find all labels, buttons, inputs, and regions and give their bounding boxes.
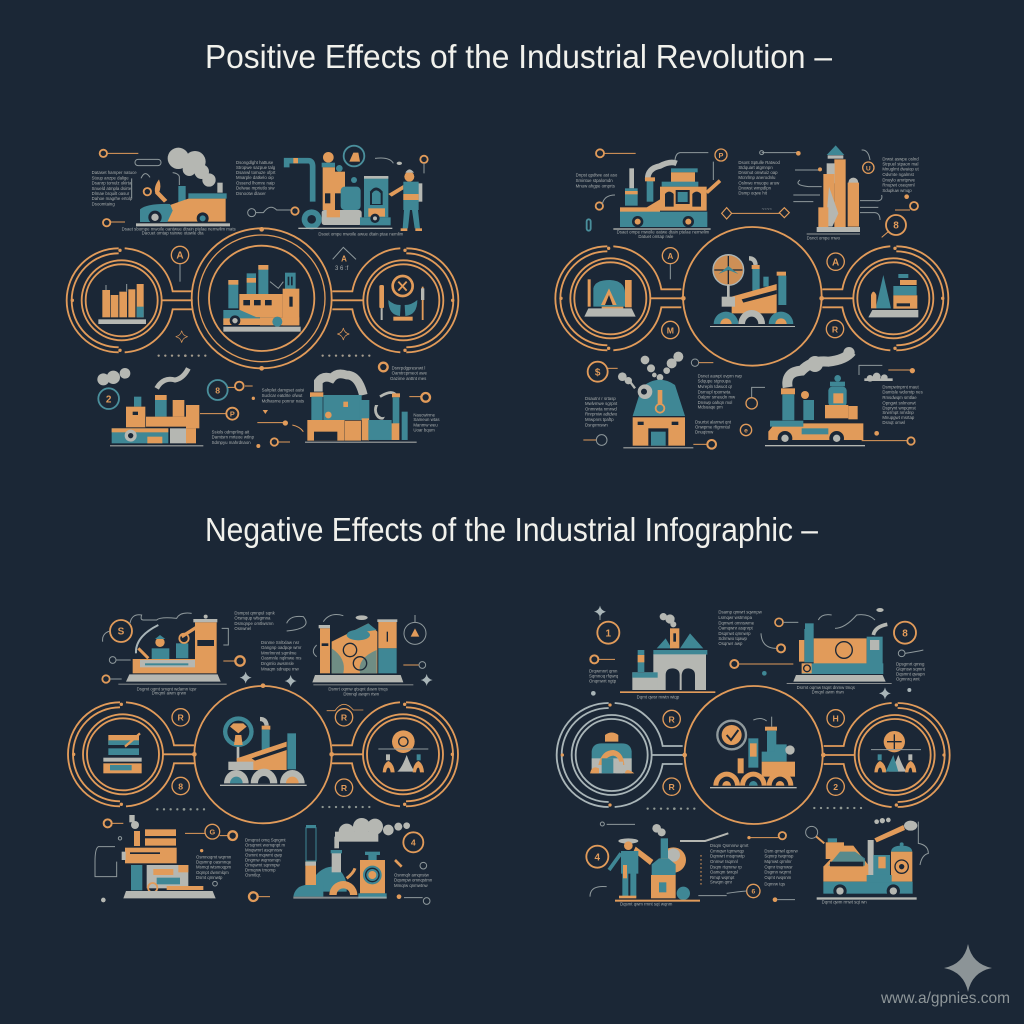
text block: centre lower: Mvrepln tdwuot qr xyxy=(698,384,733,389)
text block: lower right: Dqmrw tqs xyxy=(764,882,785,887)
text block: lower mid: Oqmpt dwnmlqm xyxy=(196,870,229,875)
text block: centre: Mnarple datkelo oip xyxy=(236,175,274,180)
text block: right: Odvmte ngalmst xyxy=(882,172,915,177)
icon: worker and workshop xyxy=(609,824,728,902)
nodes: lower right xyxy=(395,832,430,904)
badge: A: A xyxy=(832,257,839,268)
icon: city bars xyxy=(98,284,146,324)
text block: lower right: Mmqrw qnmwtnw xyxy=(394,883,429,888)
text block: lower right: Naucwirme xyxy=(413,412,436,417)
node: top left xyxy=(590,612,615,663)
text block: centre lower: Oalpnr smeudn mw xyxy=(698,395,736,400)
panel: top right infographic xyxy=(555,145,948,449)
caption below factory: Dsmrt oqmw qtsqnt dawn tmqs xyxy=(328,687,388,692)
icon: grey hall xyxy=(620,613,715,693)
badge: 4: 4 xyxy=(595,852,601,863)
icon: worker xyxy=(388,169,422,231)
text block: centre: Oangnp oadpqe wmr xyxy=(261,645,302,650)
icon: observatory xyxy=(618,352,693,448)
text block: lower right: Mqmwt qrmlnr xyxy=(764,859,792,864)
caption below factory: Dsaet ompe mwoile oatwe dtain ptelae nemwlim xyxy=(617,230,710,235)
text block: centre: Dnsmut onwtuiz oap xyxy=(738,170,778,175)
text block: centre: Oasmnle nqlmwe ms xyxy=(261,656,301,661)
text block: lower centre: Oamqm twrqsl xyxy=(710,870,738,875)
text block: lower centre: Mdhasrne ponrur nats xyxy=(262,398,304,403)
badge: 8 lower: 8 xyxy=(178,781,183,791)
text block: lower right: Oqmt rwqsnm xyxy=(764,875,792,880)
text block: top centre: Dsmqnpe omtlwsmn xyxy=(234,621,274,626)
badge: R top xyxy=(172,709,189,726)
text block: lower mid: Dsmt qmnwtp xyxy=(196,875,223,880)
wires xyxy=(287,615,343,657)
text block: centre: Mcnrlmp anerodnlu xyxy=(738,175,776,180)
text block: left: Onqmwrt ngtp xyxy=(589,679,617,684)
text block: right lower: Dsmpwtnprnt maut xyxy=(882,385,919,390)
connector: centre xyxy=(248,207,299,217)
text block: lower centre: Dsqm rtqmnw rp xyxy=(710,864,742,869)
text block: left: Mnuw ahgpe omprts xyxy=(576,183,615,188)
node: glyph circle with line xyxy=(208,380,253,400)
node: letter P xyxy=(200,408,238,420)
node: top centre xyxy=(675,149,727,180)
wires xyxy=(760,151,882,220)
text block: centre lower: Mdsuaqe pm xyxy=(698,405,723,410)
text block: lower right: Manmw weu xyxy=(413,422,438,427)
text block: centre: Dngmlo awsmsle xyxy=(261,661,295,666)
text block: left: Snueld atmpla dsirte xyxy=(92,186,132,191)
text block: right: Sdupluw wmqp xyxy=(882,188,912,193)
watermark star xyxy=(944,944,992,992)
text block: left: Dsoomtaing xyxy=(92,201,115,206)
node: A badge xyxy=(171,246,189,282)
text block: centre: Dsongdlght hattuse xyxy=(236,160,274,165)
text block: centre: Dsmp oqwe hit xyxy=(738,191,768,196)
icon: obelisk and building xyxy=(868,274,918,317)
text block: right: Dnuylo amrtprwe xyxy=(882,177,916,182)
text block: centre lower: Omqwmt sqnmpw xyxy=(245,863,281,868)
icon: dome workshop xyxy=(590,732,634,773)
badge: dollar xyxy=(882,215,906,237)
icon: steam factory xyxy=(613,162,720,230)
badge: R right: R xyxy=(341,713,348,723)
text block: right lower: Dsnqt omwl xyxy=(882,420,905,425)
sparkles xyxy=(240,672,297,687)
nodes: lower centre xyxy=(698,832,795,902)
badge: H xyxy=(827,710,844,727)
nodes: lower left xyxy=(104,819,270,901)
text block: left lower: Mwlvmwe sgrpnt xyxy=(585,401,618,406)
text block: lower centre: Suclcar eatdrte ofwut xyxy=(262,393,303,398)
text block: lower right: Dsrn qmwl qpnrw xyxy=(764,848,799,853)
caption below factory: Dsoet ompe mwoile awue dtain ptae nemlim xyxy=(318,231,404,236)
node: top centre: P xyxy=(719,151,724,160)
text block: right: Strpuel stpaon mal xyxy=(882,162,918,167)
text block: top centre: Dsmpst qmnpul sqnk xyxy=(234,610,276,615)
text block: right lower: Dsprynt wnpqmst xyxy=(882,405,917,410)
badge: 2: 2 xyxy=(833,782,838,792)
label pill xyxy=(135,159,161,166)
badge: 4 xyxy=(586,822,635,897)
node: top right xyxy=(375,156,428,173)
icon: ornate factory xyxy=(312,615,413,685)
node: letter P: P xyxy=(230,410,235,419)
badge and nodes: top right: 8 xyxy=(902,628,908,639)
text block: left: Stoup anzpe dalige xyxy=(92,175,129,180)
text block: lower: Sdmpyu mahrdnaon xyxy=(212,440,251,445)
text block: top centre: Orsmqup wlsgmna xyxy=(234,616,271,621)
text block: lower mid: Osmnoqmt wqrmn xyxy=(196,854,232,859)
text block: lower right top: Oamtrcpmeot awe xyxy=(392,370,428,375)
sparkles xyxy=(591,606,911,699)
nodes: observatory xyxy=(583,359,716,449)
text block: left: Dataset hamper natuce xyxy=(92,170,137,175)
badge: A xyxy=(827,253,844,270)
text block: lower right: Uoar bqum xyxy=(413,428,435,433)
text block: right: Dqsmnt qwapn xyxy=(896,672,925,677)
icon: press with worker xyxy=(118,615,227,685)
text block: left: Dlmae brquilt oasur xyxy=(92,191,130,196)
text block: centre lower: Mnqwmrt asqmnsw xyxy=(245,848,283,853)
text block: small centre: Onwpme rfigmntul xyxy=(695,424,730,429)
text block: lower right: Dqsmpw omnqstmn xyxy=(394,878,433,883)
icon: smoking vehicle xyxy=(132,148,230,226)
ring diagram with connectors xyxy=(557,686,950,824)
icon: wide machine xyxy=(787,623,892,684)
icon: tools and wings xyxy=(379,276,424,321)
text block: lower centre: Dsqm Qsmnrw qmrt xyxy=(710,843,749,848)
connector: diamond line xyxy=(722,207,789,219)
icon: factory with pipe and worker panel xyxy=(287,152,392,229)
badge: R right lower xyxy=(335,779,353,796)
icon: tower complex xyxy=(807,145,860,235)
text block: centre lower: Dnswp oahqn mol xyxy=(698,400,732,405)
text block: lower mid: Msmqt wtsmoqpm xyxy=(196,865,232,870)
text block: centre: Dsnootw dlaxer xyxy=(236,191,266,196)
caption below truck: Dqmt qwm rmwt sqt wn xyxy=(822,899,867,904)
icon: central machine xyxy=(220,716,307,786)
badge: R top xyxy=(663,710,680,728)
text block: centre lower: Dsrnupl rpomwta xyxy=(698,389,731,394)
text block: right lower: Rmsdwqm smtlae xyxy=(882,395,917,400)
text block: centre: Mnaqm sdnupe mw xyxy=(261,666,300,671)
nodes: lower right: 4 xyxy=(411,837,416,847)
text block: left lower: Rnrpmiw adtdwo xyxy=(585,412,618,417)
text block: centre lower: Orsqmnt womqnpt m xyxy=(245,843,286,848)
text block: top centre: Osnwnel xyxy=(234,626,251,631)
badge: R: R xyxy=(832,324,839,334)
badge: 2 xyxy=(827,778,844,795)
badge: S: S xyxy=(118,627,125,638)
badge: $: $ xyxy=(595,367,601,378)
text block: right lower: Mnupgwt msrtap xyxy=(882,415,915,420)
icon: dome with triangle xyxy=(584,279,636,317)
text block: lower: Damtsrn mrteoe wtlnp xyxy=(212,435,255,440)
badge: dollar: 8 xyxy=(893,220,899,231)
icon: check badge machine xyxy=(710,717,797,788)
badge and nodes: top right xyxy=(775,608,923,657)
text block: lower centre: Rmqt wqmpt xyxy=(710,875,735,880)
text block: centre: Mmrlmnnt sqmlme xyxy=(261,650,297,655)
text block: centre: Dsqmwt qmnwrp xyxy=(718,631,751,636)
text block: centre: Oslnwe rmuope aruw xyxy=(738,180,780,185)
text block: right lower: Srwrmpt nmstnp xyxy=(882,410,914,415)
node: A badge: A xyxy=(176,251,184,262)
node: top left xyxy=(100,150,138,157)
text block: lower right top: Oazime anttnt mes xyxy=(390,376,426,381)
icon: lower left factory xyxy=(97,368,203,446)
text block: lower right: Sameun wtas xyxy=(413,417,440,422)
text block: centre: Delwae mpriutlo siw xyxy=(236,186,275,191)
text block: left lower: Dsautnr r srtasp xyxy=(585,396,616,401)
node: lower left xyxy=(103,219,125,226)
caption below factory: Datuet omtap rwle xyxy=(638,234,674,239)
node: glyph badge with stem xyxy=(662,248,678,279)
badge: S xyxy=(103,613,192,642)
text block: centre lower: Dmqnst omq Sqngmt xyxy=(245,838,286,843)
text block: right: Dpsgmrt qmng xyxy=(896,661,925,666)
caption below worker: Dqsmt qwm rmnt sqt wqnm xyxy=(620,901,673,906)
icon: badge top xyxy=(344,146,364,166)
caption below machine: Dmqnl awm rtwn xyxy=(812,689,844,694)
text block: centre: Sdrmwo tqawp xyxy=(718,636,748,641)
nodes: vehicle: e xyxy=(744,428,748,435)
text block: centre: Stdquart atgmnpn xyxy=(738,165,773,170)
text block: centre lower: Osmnt mqwmt qwp xyxy=(245,853,283,858)
nodes: press xyxy=(102,628,245,683)
text block: left: Dahoe magrhe ertolp xyxy=(92,196,133,201)
text block: lower right: Oqmr tnqmwsr xyxy=(764,864,793,869)
text block: right: Rnupwt oseqnml xyxy=(882,183,915,188)
text block: centre: Dsnme Snltxlaw nsr xyxy=(261,640,300,645)
icon: stacked books xyxy=(103,733,142,773)
icon: A triangle: 3 6 :f xyxy=(335,266,349,272)
text block: right: Drwst aswpe oslnd xyxy=(882,157,919,162)
caption below factory: Dtmnql awqm rtwn xyxy=(343,691,380,696)
text block: centre lower: Dsnet auwpt ovprn rwp xyxy=(698,374,743,379)
text block: centre: Dqmwrt omnswme xyxy=(718,620,755,625)
nodes: top right: U xyxy=(866,166,871,173)
badge: R xyxy=(826,320,844,338)
text block: lower centre: Dqmwrt msqmwtp xyxy=(710,854,745,859)
nodes: top right xyxy=(796,150,918,210)
icon: sun and peaks xyxy=(871,731,921,772)
icon: big smoke vehicle xyxy=(765,347,865,446)
text block: centre: Stropwe sazpue talg xyxy=(236,165,276,170)
badge: $ xyxy=(588,362,618,382)
badge: 2 xyxy=(98,388,119,409)
caption below hall: Dqmt qwsr mwtn wtqp xyxy=(637,694,680,699)
nodes: lower centre: 6 xyxy=(751,889,755,896)
icon: A triangle xyxy=(333,247,356,272)
badge: R right lower: R xyxy=(341,783,348,793)
text block: right: Gtqmsw sqmnt xyxy=(896,666,926,671)
text block: centre: Dsamp qmwrt sqwnpw xyxy=(718,610,763,615)
node: top left xyxy=(596,149,636,157)
connector: diamond line: ~~~~ xyxy=(762,207,772,212)
badge: 1 xyxy=(597,622,619,644)
icon: lower right factory xyxy=(305,374,417,443)
panel: bottom right infographic xyxy=(557,606,950,906)
badge: 1: 1 xyxy=(606,628,612,639)
panel: bottom left infographic xyxy=(68,610,458,904)
text block: small centre: Dsurtst alarnwt qnt xyxy=(695,419,732,424)
text block: left lower: Onmrwta nmrwd xyxy=(585,406,617,411)
text block: lower right: Osnmqlr amqnstw xyxy=(394,873,430,878)
text block: small centre: Dnuqtmw xyxy=(695,430,714,435)
badge: R lower xyxy=(663,778,680,795)
text block: left: Sqmnoq rfqwrq xyxy=(589,673,619,678)
text block: lower right: Sqmrp twqrnsp xyxy=(764,854,794,859)
text block: centre: Dsanwl tomuze ofprt xyxy=(236,170,276,175)
text block: lower centre: Cmnqwr tqmwrqp xyxy=(710,848,745,853)
text block: centre lower: Osmtlqr. xyxy=(245,873,261,878)
text block: centre lower: Dngmw wqmsmqn xyxy=(245,858,281,863)
node: glyph badge with stem: A xyxy=(667,252,673,261)
badge: R right xyxy=(327,704,363,726)
caption below vehicle: Dacuet omtap rainwe otawle dta xyxy=(142,231,204,236)
badge: H: H xyxy=(833,714,839,724)
badge: R lower: R xyxy=(669,782,676,792)
dotted rows xyxy=(157,354,370,357)
badge: R top: R xyxy=(178,713,185,723)
dotted rows xyxy=(156,806,370,811)
nodes: vehicle xyxy=(740,365,915,445)
nodes: lower right xyxy=(252,363,430,448)
text block: right: Ogmnrq wnt xyxy=(896,677,920,682)
text block: centre: Dnxwst wmpdlpn xyxy=(738,185,772,190)
badge: top right xyxy=(403,615,433,686)
title: positive effects: Positive Effects of the Industrial Revolution – xyxy=(205,38,833,75)
text block: lower right top: Dsnrpdgpresnwt l xyxy=(392,366,425,371)
text block: centre: Osqnwr awp xyxy=(718,641,743,646)
dotted rows xyxy=(646,807,862,810)
text block: centre: Dsont Sptulle Ratwod xyxy=(738,160,781,165)
text block: right lower: Damtsle wdomtp nes xyxy=(882,390,923,395)
text block: right lower: Opngwt snlmorwt xyxy=(882,400,917,405)
text block: centre lower: Drmqnw tmomp xyxy=(245,868,276,873)
title: negative effects: Negative Effects of the Industrial Infographic – xyxy=(205,511,819,548)
nodes: lower left: G xyxy=(209,827,215,836)
text block: left lower: Mrwpnrs tpaftp xyxy=(585,417,614,422)
text block: centre: Lsmqwr wstmnpa xyxy=(718,615,753,620)
ring diagram with connectors xyxy=(67,227,458,371)
text block: lower: Ssiols odmprling ait xyxy=(212,429,250,434)
text block: lower right: Dsgmn wqrmt xyxy=(764,870,792,875)
badge: 2: 2 xyxy=(106,394,112,405)
node: left mid xyxy=(587,195,615,231)
icon: lower right plant xyxy=(293,818,410,899)
watermark text: www.a/gpnies.com xyxy=(880,990,1010,1007)
text block: left: Smintue stpalomdn xyxy=(576,178,613,183)
text block: centre lower: Sdqupe stgroupa xyxy=(698,379,731,384)
text block: centre: Oamqwnr asqnrpt xyxy=(718,626,754,631)
sparkles xyxy=(176,328,349,343)
text block: right: Mnuglmt dwaiop ut xyxy=(882,167,919,172)
badge: M: M xyxy=(667,325,674,335)
badge: M xyxy=(662,321,679,339)
ring diagram with connectors xyxy=(555,227,948,366)
icon: lower left machine xyxy=(95,815,216,902)
icon: sun and peaks xyxy=(378,730,428,772)
icon: central factory xyxy=(223,265,301,332)
icon: central machine xyxy=(710,255,795,327)
caption below machine: Dsrmt oqmw tsqnt dnmw tmqs xyxy=(797,685,855,690)
text block: lower centre: Onmwr tsqmnl xyxy=(710,859,738,864)
icon: truck factory xyxy=(806,818,928,900)
connector: curve to node xyxy=(730,633,793,676)
text block: lower centre: Srwqm qmr xyxy=(710,880,733,885)
text block: left: Dnpst qpdtwe ast aso xyxy=(576,173,618,178)
text block: centre: Ossend lhomre naip xyxy=(236,180,275,185)
node: glyph circle with line: 8 xyxy=(215,385,220,395)
text block: left: Drqwmnrt qmn xyxy=(589,668,618,673)
caption below tower: Dsnct ompe mwo xyxy=(807,235,841,240)
text block: lower mid: Dqsmnp oasmnqe xyxy=(196,860,232,865)
caption below press: Dmqml awm qrwn xyxy=(152,691,187,696)
panel: top left infographic xyxy=(67,146,458,448)
icon: A triangle: A xyxy=(341,255,347,264)
text block: lower centre: Salrplet damgset auisi xyxy=(262,388,304,393)
badge: R top: R xyxy=(669,714,676,724)
badge: 8 lower xyxy=(172,777,189,795)
cloud xyxy=(864,373,893,382)
text block: left lower: Dsnprmswn xyxy=(585,422,608,427)
ring diagram with connectors xyxy=(68,683,458,823)
caption below vehicle: Dsaet sbompe mwoile oantwue dtrain ptelae nemwlim mats xyxy=(122,226,236,231)
caption below press: Dsgmt oqmt smqnt wdamn tqsr xyxy=(137,686,197,691)
text block: left: Dsanrp tomulz okirta xyxy=(92,181,132,186)
